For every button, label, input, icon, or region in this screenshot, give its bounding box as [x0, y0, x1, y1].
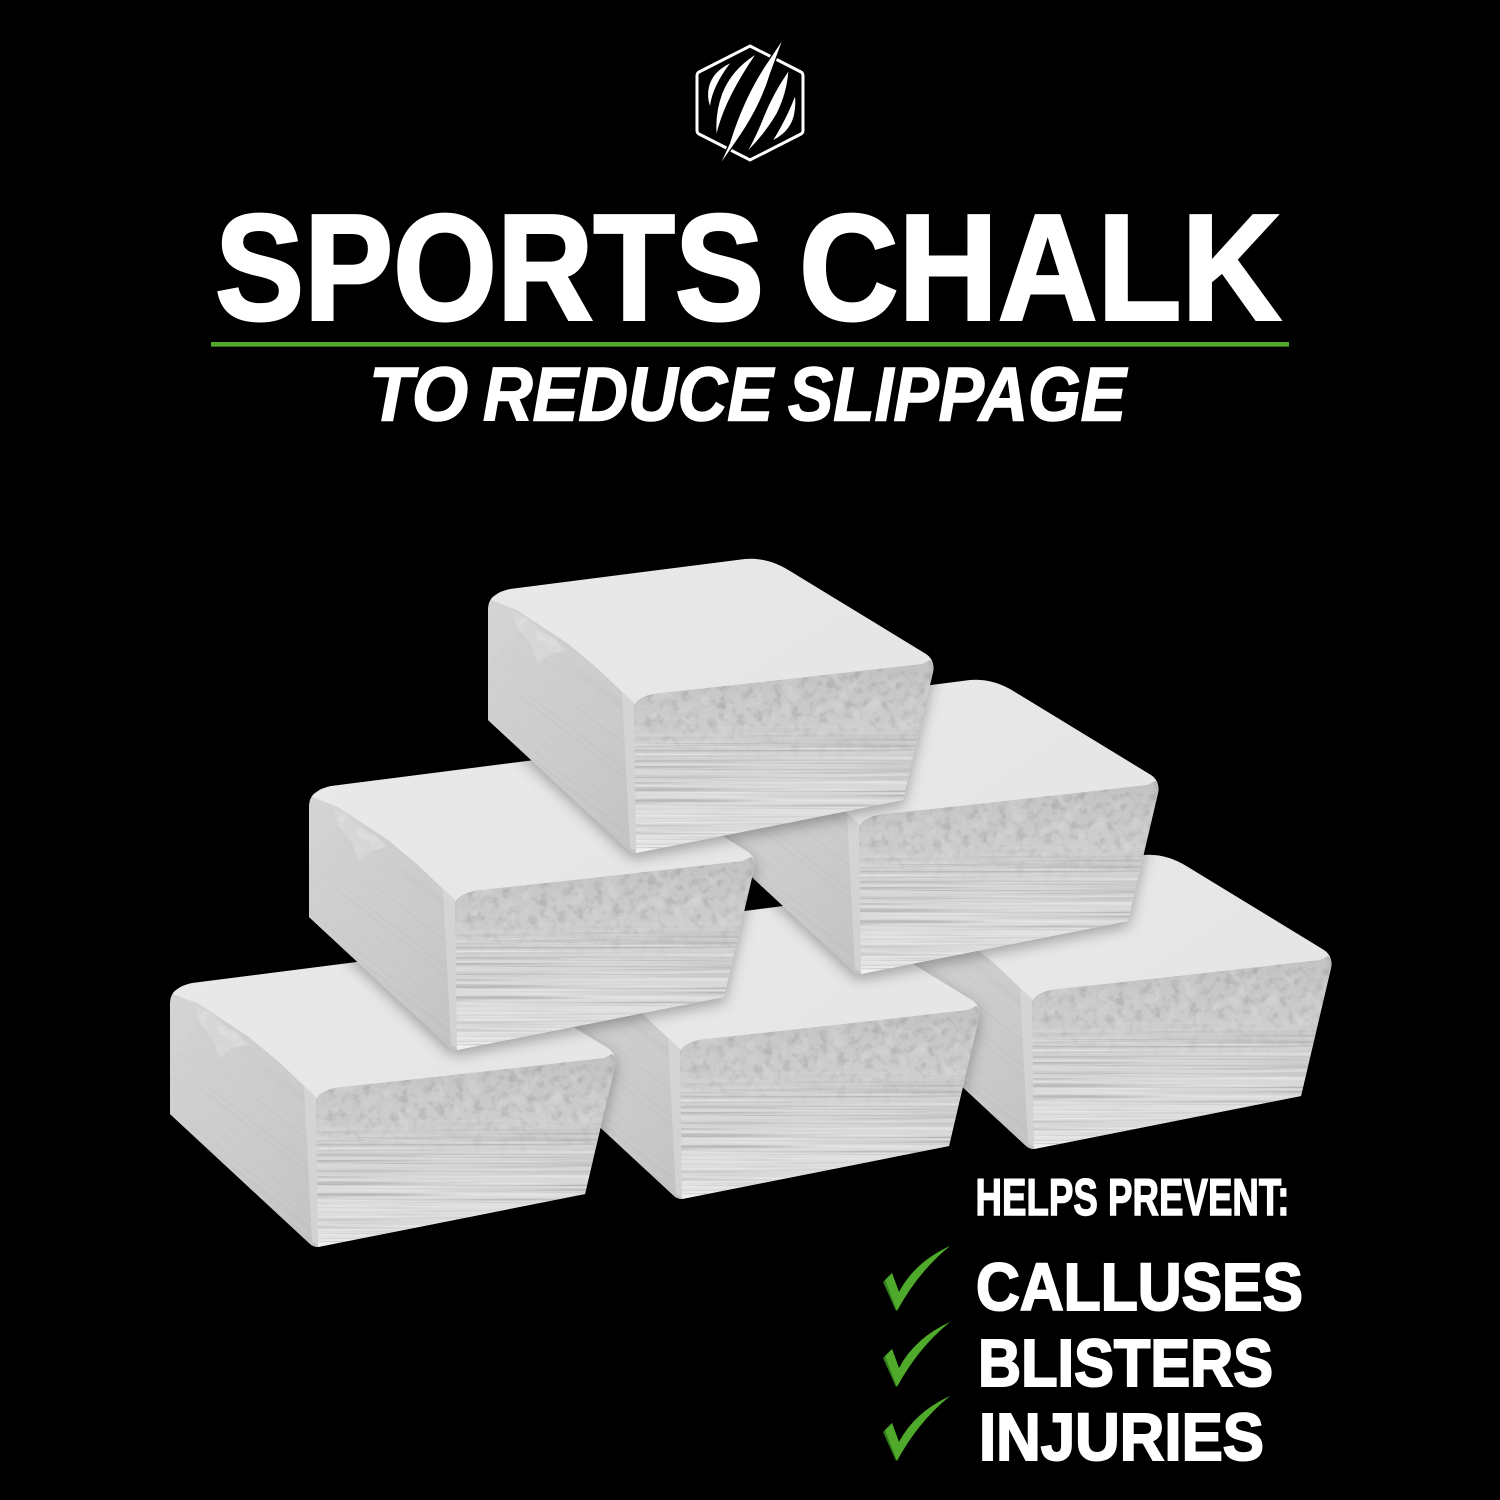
chalk block: top — [403, 539, 940, 935]
chalk block: middle right — [628, 660, 1165, 1056]
title — [215, 182, 1281, 352]
chalk block: middle left — [224, 736, 761, 1132]
green divider line — [211, 342, 1289, 347]
infographic canvas — [170, 42, 1332, 1462]
title: SPORTS — [215, 182, 764, 352]
check icon: blisters — [883, 1322, 950, 1387]
subtitle: SLIPPAGE — [788, 352, 1128, 437]
checklist — [883, 1246, 1303, 1475]
chalk block: bottom left — [85, 933, 622, 1329]
item: blisters: BLISTERS — [978, 1326, 1273, 1401]
title: CHALK — [799, 182, 1281, 352]
check icon: injuries — [883, 1396, 950, 1461]
chalk block: bottom center — [449, 885, 986, 1281]
item: injuries: INJURIES — [979, 1400, 1264, 1475]
chalk block: bottom right — [801, 835, 1338, 1231]
subtitle — [369, 352, 1128, 437]
chalk block pyramid — [85, 539, 1338, 1329]
logo: hexagon with claw marks — [697, 42, 803, 162]
check icon: calluses — [883, 1246, 950, 1311]
subtitle: REDUCE — [483, 352, 775, 437]
item: calluses: CALLUSES — [976, 1250, 1303, 1325]
subtitle: TO — [369, 352, 468, 437]
helps prevent heading: HELPS PREVENT: — [976, 1169, 1290, 1227]
